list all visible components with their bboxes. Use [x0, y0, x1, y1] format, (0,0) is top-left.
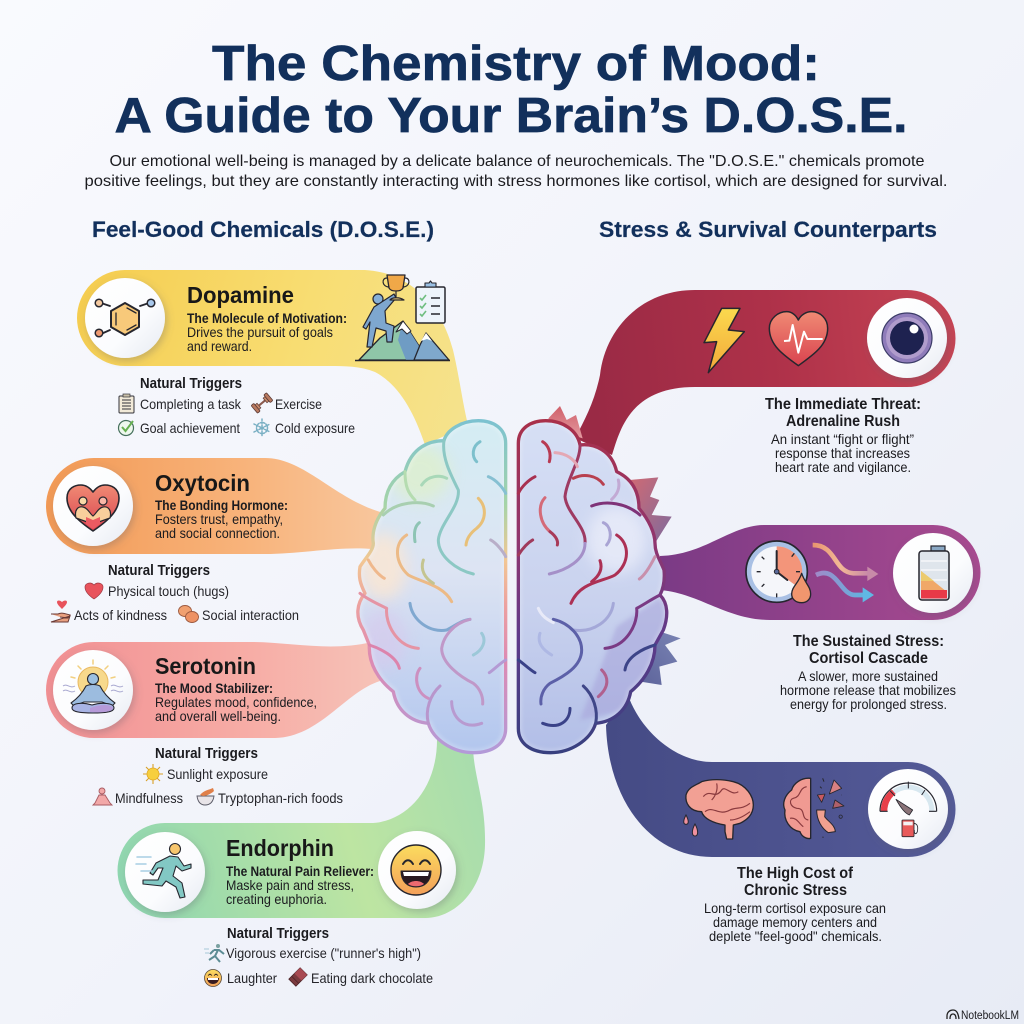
- oxytocin triggers: Natural Triggers: [108, 563, 210, 579]
- serotonin description: [155, 680, 317, 724]
- endorphin name: Endorphin: [226, 835, 334, 861]
- endorphin triggers: Laughter: [227, 970, 277, 986]
- icon: runner: [125, 832, 205, 912]
- brain: [358, 406, 681, 753]
- chronic stress panel: [684, 769, 948, 944]
- oxytocin triggers: Social interaction: [202, 607, 299, 623]
- title: The Chemistry of Mood:: [212, 37, 820, 91]
- chronic stress text: The High Cost of: [737, 865, 854, 882]
- icon: pink brain with drops: [684, 780, 753, 839]
- chronic stress text: Long-term cortisol exposure can: [704, 900, 886, 916]
- right hemisphere: [518, 421, 667, 753]
- oxytocin description: and social connection.: [155, 525, 280, 541]
- oxytocin name: Oxytocin: [155, 470, 250, 496]
- icon: sun: [143, 764, 163, 784]
- endorphin description: [226, 863, 374, 907]
- intro text: positive feelings, but they are constantly interacting with stress hormones like cortisol, which are designed for survival.: [84, 173, 948, 190]
- dopamine description: Drives the pursuit of goals: [187, 324, 333, 340]
- icon: small laugh: [204, 970, 222, 986]
- oxytocin triggers: [51, 563, 299, 623]
- endorphin description: Maske pain and stress,: [226, 877, 354, 893]
- chronic stress text: Chronic Stress: [744, 882, 847, 899]
- cortisol text: Cortisol Cascade: [809, 650, 928, 667]
- left hemisphere: [358, 421, 506, 753]
- dopamine triggers: Goal achievement: [140, 420, 240, 436]
- endorphin triggers: Natural Triggers: [227, 926, 329, 942]
- icon: arrows: [813, 545, 878, 602]
- oxytocin description: Fosters trust, empathy,: [155, 511, 283, 527]
- icon: checklist: [416, 281, 445, 323]
- icon: check: [118, 420, 134, 436]
- band: serotonin: [46, 642, 380, 738]
- icon: clock with droplet: [746, 541, 811, 603]
- adrenaline text: heart rate and vigilance.: [775, 459, 911, 475]
- chronic stress text: [704, 865, 886, 944]
- stress spikes: [548, 406, 681, 685]
- cortisol text: [780, 633, 956, 712]
- icon: food bowl: [197, 788, 214, 805]
- cortisol text: hormone release that mobilizes: [780, 682, 956, 698]
- dopamine triggers: Completing a task: [140, 396, 242, 412]
- band: dopamine: [77, 270, 468, 445]
- icon: molecule: [85, 278, 165, 358]
- adrenaline text: response that increases: [775, 445, 910, 461]
- adrenaline text: An instant “fight or flight”: [771, 431, 914, 447]
- endorphin description: The Natural Pain Reliever:: [226, 863, 374, 879]
- serotonin name: Serotonin: [155, 653, 256, 679]
- icon: small runner: [204, 944, 224, 962]
- serotonin triggers: Natural Triggers: [155, 746, 258, 762]
- endorphin description: creating euphoria.: [226, 891, 327, 907]
- icon: heart with pulse: [769, 312, 828, 366]
- dopamine triggers: [118, 376, 355, 437]
- heading: feel-good chemicals: Feel-Good Chemicals (D.O.S.E.): [92, 217, 434, 242]
- endorphin triggers: [204, 926, 433, 986]
- icon: dumbbell: [251, 393, 273, 413]
- endorphin triggers: Vigorous exercise ("runner's high"): [226, 945, 421, 961]
- band: adrenaline: [575, 290, 956, 455]
- adrenaline panel: [704, 298, 947, 475]
- cortisol text: The Sustained Stress:: [793, 633, 944, 650]
- oxytocin description: The Bonding Hormone:: [155, 497, 288, 513]
- icon: lightning bolt: [704, 308, 744, 373]
- serotonin triggers: Tryptophan-rich foods: [218, 790, 343, 806]
- oxytocin panel: [51, 466, 299, 623]
- dopamine description: and reward.: [187, 338, 252, 354]
- icon: climber on mountain with trophy: [355, 275, 450, 360]
- intro text: Our emotional well-being is managed by a delicate balance of neurochemicals. The "D.O.S.E." chemicals promote: [110, 153, 925, 170]
- icon: heart: [85, 583, 103, 599]
- dopamine triggers: Cold exposure: [275, 420, 355, 436]
- serotonin description: Regulates mood, confidence,: [155, 694, 317, 710]
- adrenaline text: [765, 396, 921, 475]
- icon: heart with people: [53, 466, 133, 546]
- serotonin triggers: Sunlight exposure: [167, 766, 268, 782]
- cortisol panel: [746, 533, 973, 712]
- band: chronic stress: [606, 695, 956, 857]
- dopamine panel: [85, 275, 450, 437]
- endorphin triggers: Eating dark chocolate: [311, 970, 433, 986]
- serotonin triggers: [93, 746, 343, 806]
- dopamine triggers: Natural Triggers: [140, 376, 242, 392]
- intro text: [84, 153, 948, 190]
- band: cortisol: [655, 525, 981, 620]
- adrenaline text: The Immediate Threat:: [765, 396, 921, 413]
- cortisol text: energy for prolonged stress.: [790, 696, 947, 712]
- icon: mindfulness figure: [93, 788, 112, 805]
- title: A Guide to Your Brain’s D.O.S.E.: [114, 89, 907, 143]
- serotonin panel: [53, 650, 343, 806]
- dopamine description: The Molecule of Motivation:: [187, 310, 347, 326]
- icon: meditating figure: [53, 650, 133, 730]
- icon: fuel gauge: [868, 769, 948, 849]
- icon: speech bubbles: [178, 606, 198, 622]
- icon: snowflake: [254, 419, 270, 437]
- dopamine description: [187, 310, 347, 354]
- heading: stress and survival: Stress & Survival Counterparts: [599, 217, 937, 242]
- dopamine name: Dopamine: [187, 282, 294, 308]
- adrenaline text: Adrenaline Rush: [786, 413, 900, 430]
- endorphin panel: [125, 831, 456, 986]
- icon: low battery: [893, 533, 973, 613]
- oxytocin triggers: Acts of kindness: [74, 607, 167, 623]
- oxytocin description: [155, 497, 288, 541]
- chronic stress text: deplete "feel-good" chemicals.: [709, 928, 882, 944]
- icon: eye: [867, 298, 947, 378]
- oxytocin triggers: Physical touch (hugs): [108, 583, 229, 599]
- band: oxytocin: [46, 458, 384, 554]
- cortisol text: A slower, more sustained: [798, 668, 938, 684]
- serotonin description: The Mood Stabilizer:: [155, 680, 273, 696]
- icon: laughing face: [378, 831, 456, 909]
- serotonin description: and overall well-being.: [155, 708, 281, 724]
- band: endorphin: [118, 740, 485, 918]
- icon: task clipboard: [119, 394, 134, 413]
- icon: chocolate: [289, 968, 307, 986]
- title: [114, 37, 907, 143]
- chronic stress text: damage memory centers and: [713, 914, 877, 930]
- serotonin triggers: Mindfulness: [115, 790, 183, 806]
- icon: giving hand: [51, 600, 70, 622]
- dopamine triggers: Exercise: [275, 396, 322, 412]
- icon: damaged brain: [784, 778, 844, 839]
